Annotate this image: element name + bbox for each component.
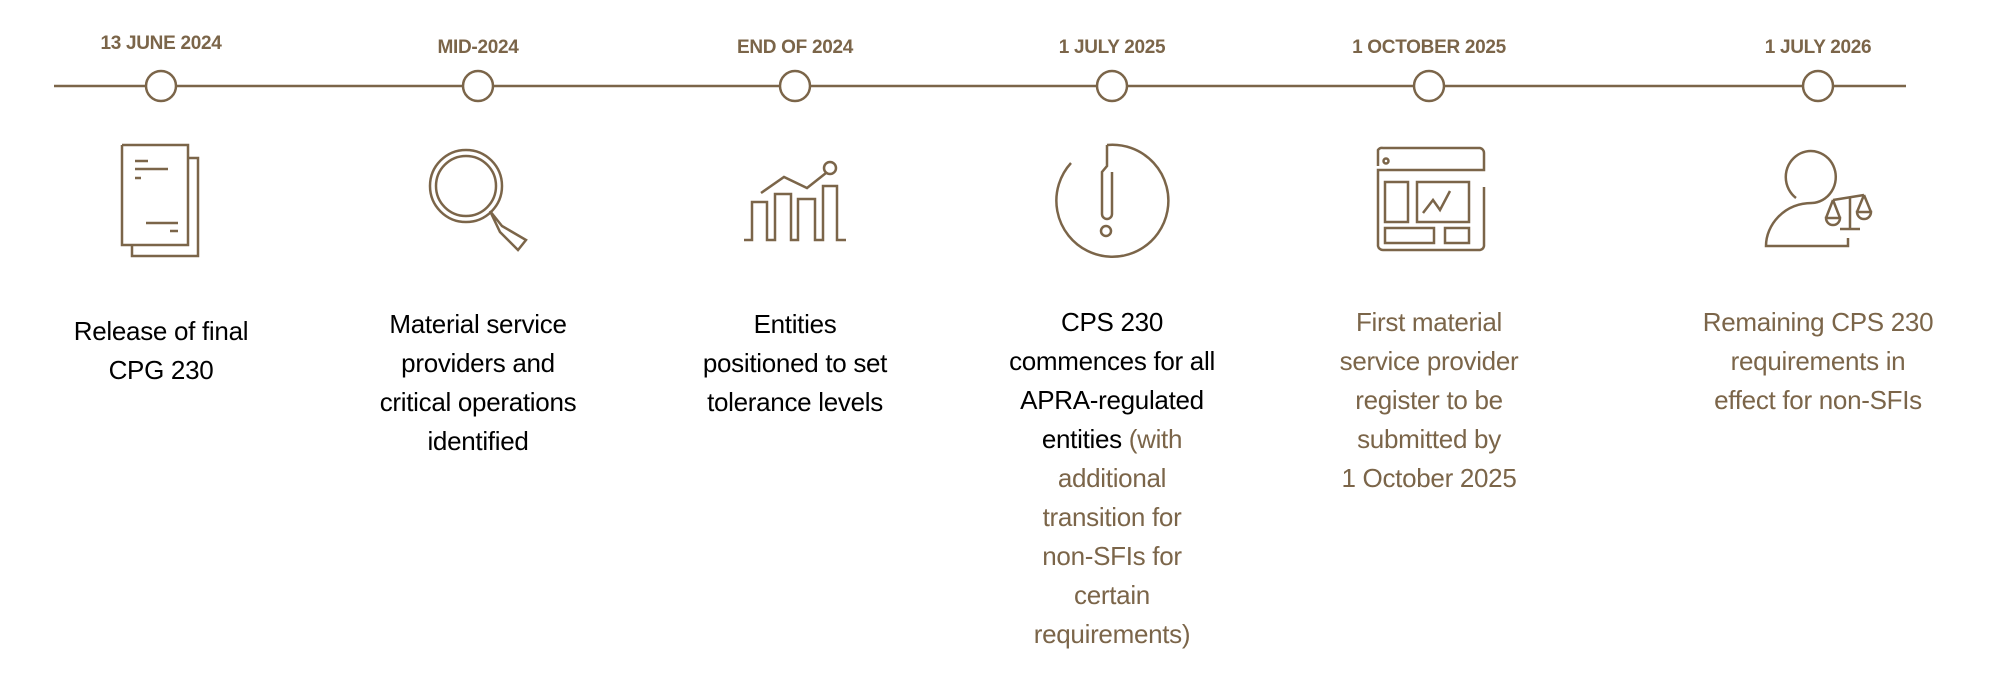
icon: person with scales [1764,150,1872,248]
text: tolerance levels: positioned to set [703,348,887,378]
text: providers identified: identified [427,426,529,456]
text: providers identified [380,309,576,456]
text: CPS 230 commences: transition for [1043,502,1181,532]
text: tolerance levels: Entities [754,309,836,339]
text: release of CPG 230 [74,316,248,385]
text: CPS 230 commences: non-SFIs for [1042,541,1182,571]
text: CPS 230 commences: APRA-regulated [1020,385,1204,415]
date: 1 October 2025: 1 OCTOBER 2025 [1352,37,1506,58]
text: remaining requirements: effect for non-SFIs [1714,385,1922,415]
text: register submission: 1 October 2025 [1341,463,1517,493]
text: tolerance levels: tolerance levels [707,387,883,417]
text: providers identified: providers and [401,348,555,378]
date: end of 2024: END OF 2024 [737,37,853,58]
text: register submission: service provider [1340,346,1518,376]
text: CPS 230 commences: requirements) [1034,619,1190,649]
text: providers identified: Material service [389,309,567,339]
icon: dashboard [1376,146,1486,252]
date: 13 June 2024: 13 JUNE 2024 [100,33,222,54]
icon: document [120,144,200,258]
date: 1 July 2026: 1 JULY 2026 [1765,37,1871,58]
date: 1 July 2025: 1 JULY 2025 [1059,37,1165,58]
icon: magnifier [428,148,528,252]
text: CPS 230 commences: CPS 230 [1061,307,1163,337]
text: remaining requirements: Remaining CPS 230 [1703,307,1933,337]
text: register submission: First material [1356,307,1502,337]
text: register submission: submitted by [1357,424,1501,454]
text: register submission: register to be [1355,385,1503,415]
text: providers identified: critical operations [380,387,576,417]
text: tolerance levels [703,309,888,417]
icon: alert [1055,144,1170,258]
date: mid-2024: MID-2024 [437,37,519,58]
text: register submission [1340,307,1518,493]
text: remaining requirements [1703,307,1933,415]
text: CPS 230 commences: additional [1058,463,1166,493]
text: CPS 230 commences: commences for all [1009,346,1215,376]
text: remaining requirements: requirements in [1731,346,1905,376]
text: release of CPG 230: Release of final [74,316,248,346]
text: release of CPG 230: CPG 230 [109,355,213,385]
text: CPS 230 commences [1009,307,1215,649]
text: CPS 230 commences: certain [1074,580,1150,610]
icon: bar chart [744,160,846,242]
text: CPS 230 commences: entities (with [1042,424,1182,454]
